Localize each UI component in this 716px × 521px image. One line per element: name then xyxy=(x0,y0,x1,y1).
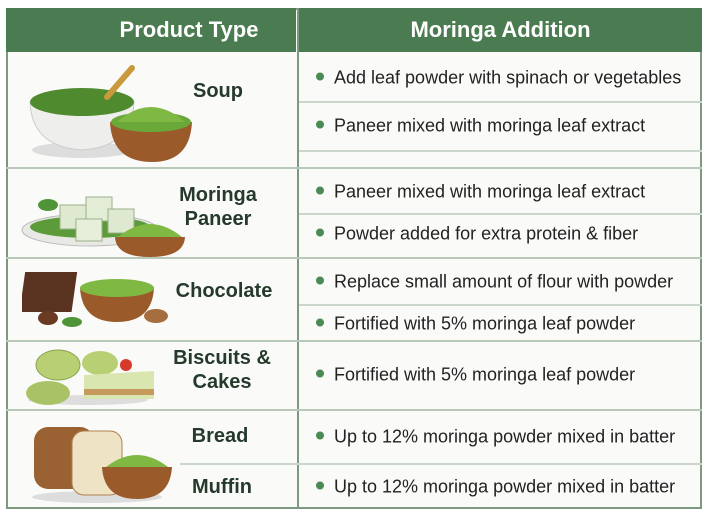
bullets: paneer xyxy=(316,182,645,244)
text: Powder added for extra protein & fiber xyxy=(334,224,638,244)
bullets: bread and muffin xyxy=(316,426,675,496)
label: biscuits & cakes: Biscuits & xyxy=(173,347,271,369)
icon: soup bowl xyxy=(30,65,192,162)
text: Up to 12% moringa powder mixed in batter xyxy=(334,426,675,446)
label: moringa paneer xyxy=(179,184,257,230)
label: bread: Bread xyxy=(192,425,248,447)
text: Fortified with 5% moringa leaf powder xyxy=(334,314,635,334)
header: product type: Product Type xyxy=(120,17,258,42)
text: Replace small amount of flour with powder xyxy=(334,272,673,292)
label: chocolate: Chocolate xyxy=(176,280,272,302)
text: Paneer mixed with moringa leaf extract xyxy=(334,116,645,136)
label: soup: Soup xyxy=(193,80,243,102)
column divider xyxy=(297,8,299,507)
header: moringa addition: Moringa Addition xyxy=(410,17,591,42)
bullets: chocolate xyxy=(316,272,673,334)
bullet: biscuits: Fortified with 5% moringa leaf powder xyxy=(334,364,635,384)
icon: biscuits and cakes xyxy=(26,350,154,405)
bullets: soup xyxy=(316,68,681,136)
label: muffin: Muffin xyxy=(192,476,252,498)
icon: paneer plate xyxy=(22,196,185,257)
header: product type xyxy=(6,8,296,52)
label: moringa paneer: Moringa xyxy=(179,184,257,206)
header: moringa addition xyxy=(299,8,702,52)
label: biscuits & cakes xyxy=(173,347,271,393)
text: Add leaf powder with spinach or vegetables xyxy=(334,68,681,88)
label: moringa paneer: Paneer xyxy=(185,208,251,230)
label: biscuits & cakes: Cakes xyxy=(193,371,251,393)
text: Up to 12% moringa powder mixed in batter xyxy=(334,476,675,496)
icon: bread xyxy=(32,427,172,503)
text: Paneer mixed with moringa leaf extract xyxy=(334,182,645,202)
icon: chocolate xyxy=(22,272,168,327)
